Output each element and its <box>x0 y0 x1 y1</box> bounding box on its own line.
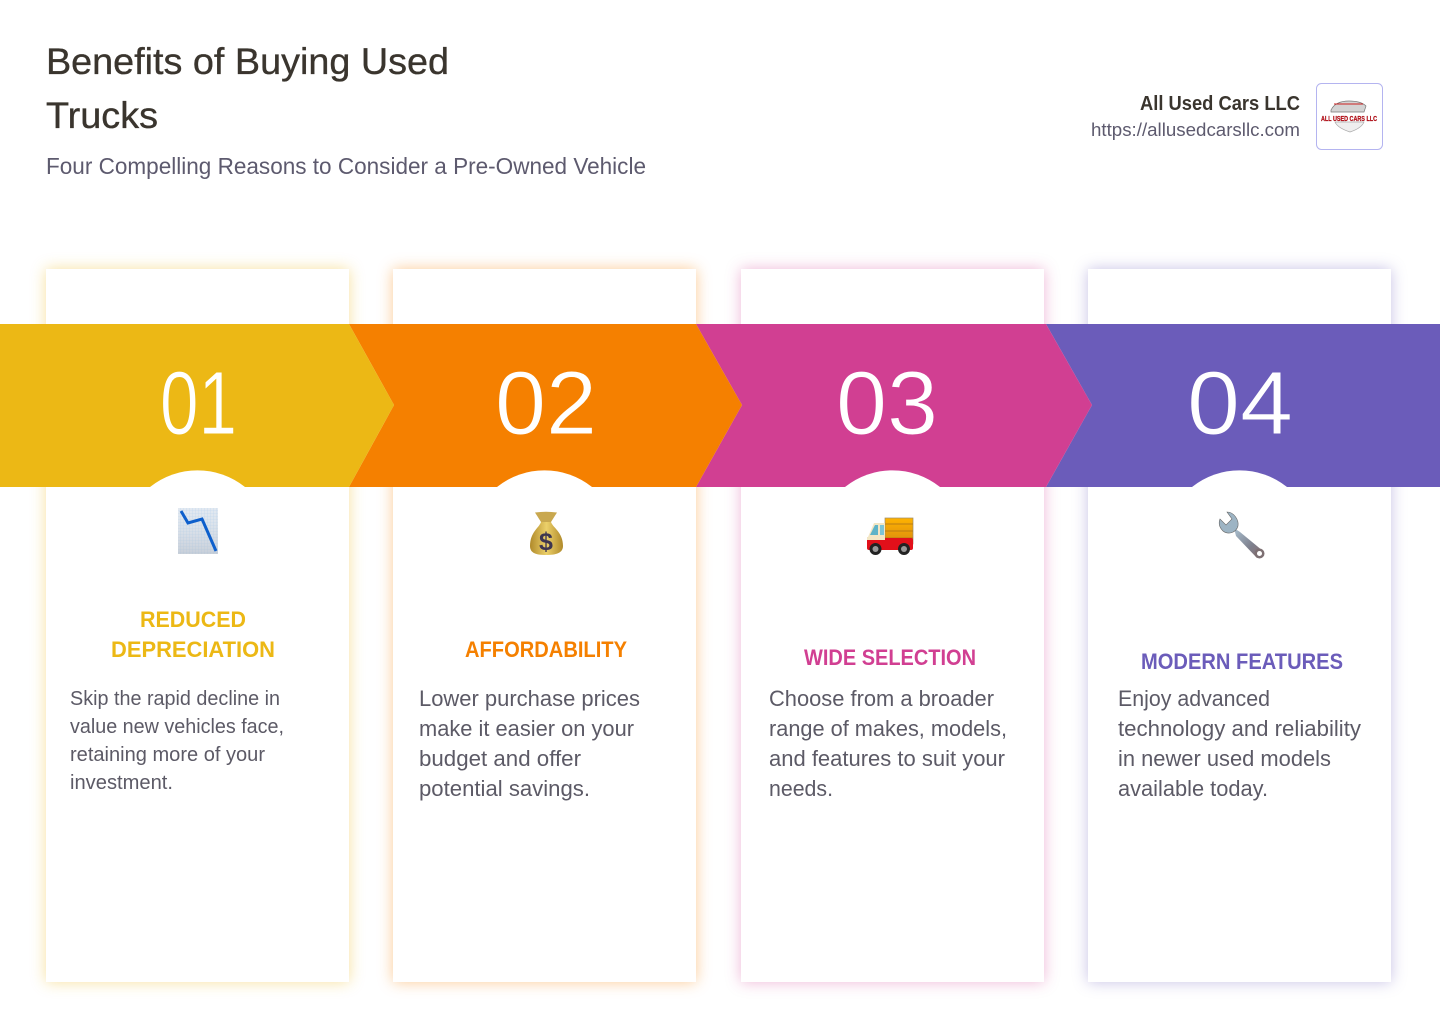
icon: wrench <box>1219 512 1264 558</box>
card 3: body text: and features to suit your <box>769 746 1005 771</box>
icon notch: step 02 <box>497 470 592 487</box>
icon notch: step 03 <box>845 470 940 487</box>
card 1: heading: DEPRECIATION <box>111 637 275 662</box>
icon notch: step 01 <box>150 470 245 487</box>
arrow band: step 04: 04 <box>1187 354 1293 454</box>
arrow band: step 03: 03 <box>836 354 938 454</box>
card 3: body text: Choose from a broader <box>769 686 994 711</box>
card 1: heading: REDUCED <box>140 607 246 632</box>
card 2: body text: potential savings. <box>419 776 590 801</box>
card 4: heading: MODERN FEATURES <box>1141 649 1343 674</box>
card 4: body text: in newer used models <box>1118 746 1331 771</box>
card 3: body text: needs. <box>769 776 833 801</box>
arrow band: step 01: 01 <box>160 354 237 454</box>
card 4: body text: Enjoy advanced <box>1118 686 1270 711</box>
card: reduced depreciation background <box>46 269 349 982</box>
card 4: body text <box>1118 686 1361 801</box>
header: title: Benefits of Buying Used <box>46 41 449 82</box>
company: name and url: All Used Cars LLC <box>1140 93 1300 115</box>
arrow band: step 01 <box>0 324 394 487</box>
arrow band: step 02 <box>349 324 742 487</box>
card 2: body text: Lower purchase prices <box>419 686 640 711</box>
card 2: body text: budget and offer <box>419 746 581 771</box>
card 4: body text: technology and reliability <box>1118 716 1361 741</box>
icon: delivery truck <box>867 518 913 555</box>
arrow band: step 03 <box>696 324 1092 487</box>
company: logo <box>1316 84 1382 150</box>
arrow band: step 02: 02 <box>495 354 597 454</box>
card 3: body text: range of makes, models, <box>769 716 1007 741</box>
icon: money bag: $ <box>539 528 553 556</box>
company: logo: ALL USED CARS LLC <box>1321 116 1377 123</box>
card 1: body text: value new vehicles face, <box>70 716 284 738</box>
header: subtitle: Four Compelling Reasons to Consider a Pre-Owned Vehicle <box>46 153 646 179</box>
card: wide selection background <box>741 269 1044 982</box>
card 1: heading <box>111 607 275 662</box>
arrow band: step 04 <box>1046 324 1440 487</box>
header: title <box>46 41 449 136</box>
card 1: body text: investment. <box>70 772 173 794</box>
icon notch: step 04 <box>1192 470 1287 487</box>
card 2: heading: AFFORDABILITY <box>465 637 627 662</box>
company: name and url <box>1091 93 1300 140</box>
header: title: Trucks <box>46 95 158 136</box>
company: name and url: https://allusedcarsllc.com <box>1091 119 1300 140</box>
icon: falling chart <box>178 508 218 554</box>
card: modern features background <box>1088 269 1391 982</box>
card 2: body text: make it easier on your <box>419 716 634 741</box>
card 1: body text <box>70 688 284 794</box>
card 3: heading: WIDE SELECTION <box>804 645 976 670</box>
card 4: body text: available today. <box>1118 776 1268 801</box>
card: affordability background <box>393 269 696 982</box>
card 2: body text <box>419 686 640 801</box>
card 1: body text: retaining more of your <box>70 744 265 766</box>
icon: money bag <box>530 512 563 556</box>
card 1: body text: Skip the rapid decline in <box>70 688 280 710</box>
card 3: body text <box>769 686 1007 801</box>
